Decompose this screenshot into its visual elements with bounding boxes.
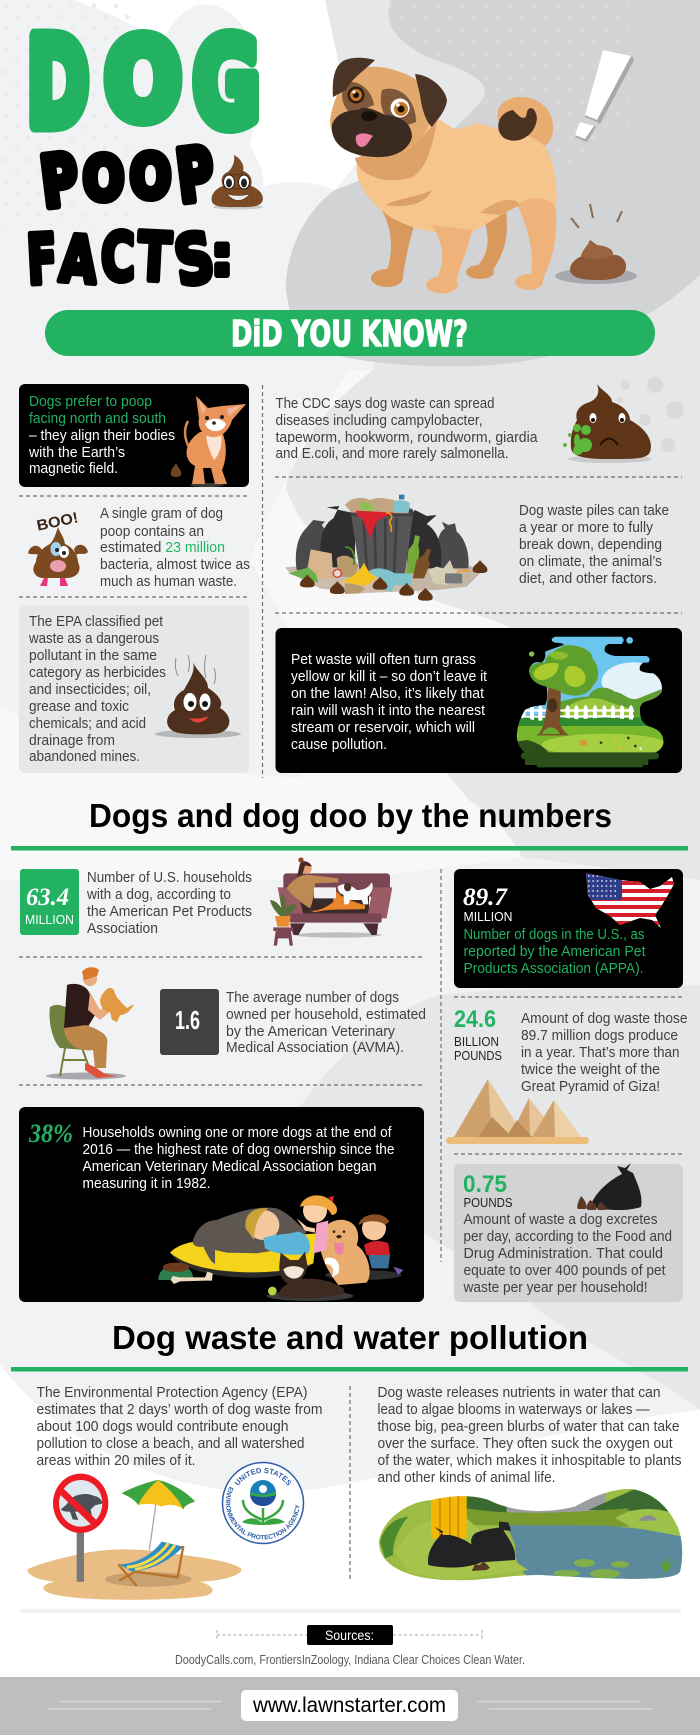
title word: DOG: G <box>193 15 260 154</box>
golden dog <box>320 1220 370 1285</box>
banana <box>341 563 377 586</box>
small poop <box>472 1561 490 1571</box>
fact text: diet, and other factors. <box>519 570 657 587</box>
plant <box>270 893 297 917</box>
sources text: DoodyCalls.com, FrontiersInZoology, Indiana Clear Choices Clean Water. <box>175 1652 525 1667</box>
fact text: bacteria, almost twice as <box>100 556 250 573</box>
sources label <box>217 1625 482 1645</box>
sack <box>337 556 358 577</box>
fact text <box>82 1124 394 1192</box>
title word: FACTS:: A <box>57 223 100 299</box>
dog <box>338 882 373 904</box>
fact text: 2016 — the highest rate of dog ownership since the <box>82 1141 394 1158</box>
woman <box>287 875 338 908</box>
dividers left column <box>19 496 248 597</box>
icon: exclamation mark <box>575 50 634 142</box>
stat badge: MILLION <box>25 912 74 927</box>
stat <box>463 884 512 924</box>
fact text: pollutant in the same <box>29 647 157 664</box>
fact text: measuring it in 1982. <box>82 1175 210 1192</box>
text block: algae blooms: Dog waste releases nutrients in water that can <box>378 1384 660 1401</box>
fact text: 89.7 million dogs produce <box>521 1027 678 1044</box>
fact text: waste per year per household! <box>463 1279 648 1296</box>
text block: EPA beach estimate <box>36 1384 322 1469</box>
pug near legs <box>518 198 556 280</box>
pug muzzle <box>332 108 412 157</box>
illustration: beach with no-dog sign <box>27 1474 242 1600</box>
stat: POUNDS <box>454 1048 502 1063</box>
fact text: equate to over 400 pounds of pet <box>464 1262 666 1279</box>
deck chair <box>118 1542 183 1586</box>
fact text: The average number of dogs <box>226 989 399 1006</box>
banner: did you know <box>45 310 655 356</box>
fact text: the American Pet Products <box>87 903 252 920</box>
text block: EPA beach estimate: The Environmental Protection Agency (EPA) <box>36 1384 308 1401</box>
icon: sad poop <box>568 384 652 463</box>
panel: 38% households <box>19 1107 424 1302</box>
blue rubbish <box>368 568 412 592</box>
overflow <box>345 498 410 513</box>
fact text <box>521 1010 688 1095</box>
icon: EPA seal: UNITED STATES <box>234 1468 292 1486</box>
paper bag <box>306 549 333 578</box>
green rule <box>11 1367 688 1372</box>
heading: water pollution: Dog waste and water pollution <box>112 1319 588 1356</box>
panel: 24.6 billion pounds <box>446 1006 688 1144</box>
banner: did you know: DiD YOU KNOW? <box>231 314 468 355</box>
fact text: category as herbicides <box>29 664 166 681</box>
stat: 24.6 <box>454 1006 496 1033</box>
fact text: stream or reservoir, which will <box>291 719 475 736</box>
title word: POOP: P <box>172 131 219 219</box>
illustration: pug <box>330 58 557 294</box>
pug eyes <box>348 86 410 118</box>
illustration: trash pile <box>285 495 487 601</box>
bowl <box>158 1265 193 1280</box>
title word: DOG: O <box>105 16 181 144</box>
fact text: Products Association (APPA). <box>464 960 644 977</box>
fact text: tapeworm, hookworm, roundworm, giardia <box>276 429 538 446</box>
text block: algae blooms: lead to algae blooms in waterways or lakes — <box>378 1401 650 1418</box>
husky <box>279 1252 307 1285</box>
fact text: Medical Association (AVMA). <box>226 1039 404 1056</box>
can <box>351 512 413 573</box>
icon: small poop <box>171 463 181 477</box>
stat badge: 1.6 <box>175 1005 200 1035</box>
illustration: polluted pond <box>379 1489 682 1580</box>
bottles <box>406 535 420 573</box>
stat: 0.75 <box>463 1171 507 1198</box>
panel: bacteria fact <box>28 505 250 590</box>
pug eye patches <box>342 82 374 114</box>
panel: 1.6 dogs per household <box>46 967 426 1080</box>
fact text: owned per household, estimated <box>226 1006 426 1023</box>
green rubbish <box>288 567 318 583</box>
divider band <box>20 1609 681 1613</box>
illustration: lawn and tree scene <box>515 635 668 767</box>
title word: DOG: D <box>27 12 89 154</box>
fact text: Dogs prefer to poop <box>29 393 152 410</box>
fact text: poop contains an <box>100 523 204 540</box>
fact text: with the Earth’s <box>28 444 125 461</box>
fact text: per day, according to the Food and <box>464 1228 672 1245</box>
icon: green germs <box>563 424 592 455</box>
fact text: reported by the American Pet <box>464 943 646 960</box>
canopy <box>529 645 598 696</box>
fact text: on climate, the animal’s <box>519 553 662 570</box>
pug head <box>330 67 432 158</box>
fact text: with a dog, according to <box>86 886 231 903</box>
sand <box>27 1549 242 1600</box>
fact text: Number of U.S. households <box>87 869 252 886</box>
fact text: cause pollution. <box>291 736 387 753</box>
fact text <box>519 502 669 587</box>
stat: MILLION <box>464 909 512 924</box>
icon: USA flag map <box>586 873 674 928</box>
fact text: grease and toxic <box>29 698 129 715</box>
poop piles <box>300 560 487 601</box>
fact text: A single gram of dog <box>100 505 223 522</box>
divider: water section <box>349 1386 351 1582</box>
fact text <box>463 1211 672 1296</box>
sources label: Sources: <box>325 1628 374 1643</box>
title word: FACTS:: T <box>136 218 173 297</box>
fact text: chemicals; and acid <box>29 715 146 732</box>
panel: EPA classified pet waste <box>19 605 249 773</box>
fact text: abandoned mines. <box>29 748 140 765</box>
fact text <box>100 505 250 590</box>
icon: smiling poop <box>155 655 241 738</box>
fact text: facing north and south <box>29 410 166 427</box>
fact text: on the lawn! Also, it’s likely that <box>291 685 485 702</box>
title word: FACTS: <box>25 218 233 302</box>
text block: algae blooms: of the water, which makes it inhospitable to plants <box>378 1452 682 1469</box>
stat: 38% <box>28 1119 73 1148</box>
stat badge <box>160 989 219 1055</box>
stat: POUNDS <box>464 1195 513 1210</box>
illustration: man holding puppy <box>46 967 134 1080</box>
fact text: Number of dogs in the U.S., as <box>464 926 644 943</box>
text block: algae blooms: and other kinds of animal life. <box>378 1469 556 1486</box>
title word: FACTS:: S <box>169 218 219 302</box>
pug tail dark <box>498 108 537 141</box>
heading: by the numbers: Dogs and dog doo by the numbers <box>89 797 612 834</box>
fact text: Dog waste piles can take <box>519 502 669 519</box>
trash bags <box>428 1522 515 1568</box>
fact text: twice the weight of the <box>521 1061 660 1078</box>
fact text <box>276 395 538 462</box>
text block: EPA beach estimate: pollution to close a beach, and all watershed <box>36 1435 304 1452</box>
stat badge <box>20 869 79 935</box>
panel: decomposition fact <box>285 495 669 601</box>
fact text: Drug Administration. That could <box>464 1245 663 1262</box>
fact text: and E.coli, and more rarely salmonella. <box>276 445 508 462</box>
icon: EPA seal <box>222 1462 304 1544</box>
stat <box>463 1171 513 1210</box>
small lawn spots <box>580 737 642 750</box>
panel: 0.75 pounds <box>454 1163 683 1302</box>
fact text: estimated 23 million <box>100 539 225 556</box>
stat badge: 63.4 <box>26 884 69 911</box>
text block: EPA beach estimate: about 100 dogs would contribute enough <box>36 1418 288 1435</box>
panel: north and south fact <box>19 384 249 487</box>
text block: algae blooms: over the surface. They often suck the oxygen out <box>378 1435 673 1452</box>
icon: pyramids <box>446 1079 589 1144</box>
fact text: drainage from <box>29 732 115 749</box>
title word: FACTS:: : <box>211 224 233 288</box>
fence <box>520 705 634 721</box>
fact text: break down, depending <box>519 536 662 553</box>
fact text: The CDC says dog waste can spread <box>276 395 494 412</box>
fact text: – they align their bodies <box>29 427 175 444</box>
fact text: much as human waste. <box>100 573 237 590</box>
green rule <box>11 846 688 850</box>
title word: POOP <box>36 131 219 224</box>
fact text: and insecticides; oil, <box>29 681 151 698</box>
fact text: American Veterinary Medical Association began <box>82 1158 376 1175</box>
fact text <box>226 989 426 1056</box>
title word: POOP: P <box>36 138 83 224</box>
pug tail <box>497 97 553 147</box>
no-dog sign <box>53 1474 108 1533</box>
title word: FACTS:: F <box>25 220 59 301</box>
ground litter <box>285 565 483 593</box>
fact text: diseases including campylobacter, <box>276 412 482 429</box>
fact text: yellow or kill it – so don’t leave it <box>291 668 488 685</box>
fact text <box>291 651 488 753</box>
fact text: magnetic field. <box>29 460 118 477</box>
boy <box>362 1216 386 1240</box>
fact text <box>86 869 252 937</box>
title word: DOG <box>27 12 260 154</box>
fact text <box>28 613 166 765</box>
grey dog <box>193 1208 307 1264</box>
icon: boo poop: BOO! <box>35 509 80 535</box>
icon: poop emoji <box>212 155 263 210</box>
fact text: Households owning one or more dogs at the end of <box>82 1124 392 1141</box>
panel: 89.7 million dogs <box>454 869 683 988</box>
right rubbish <box>428 560 463 585</box>
fact text: Pet waste will often turn grass <box>291 651 476 668</box>
fact text: The EPA classified pet <box>29 613 164 630</box>
stat <box>454 1006 502 1063</box>
icon: EPA seal: ENVIRONMENTAL PROTECTION AGENCY <box>226 1486 300 1540</box>
panel: grass and pollution fact <box>276 628 682 773</box>
bags <box>296 506 469 570</box>
icon: chihuahua <box>185 396 246 487</box>
fact text: Association <box>87 920 158 937</box>
text block: EPA beach estimate: areas within 20 miles of it. <box>36 1452 196 1469</box>
text block: algae blooms: those big, pea-green blurbs of water that can take <box>378 1418 680 1435</box>
title word: POOP: O <box>83 144 124 214</box>
pug far legs <box>371 208 507 287</box>
post <box>77 1533 84 1582</box>
fact text: a year or more to fully <box>519 519 653 536</box>
icon: trash bag with poop <box>577 1163 641 1210</box>
pug body <box>357 118 557 234</box>
icon: germs background <box>617 377 684 452</box>
pug ears <box>333 58 375 97</box>
fact text <box>464 926 646 977</box>
fact text: Amount of dog waste those <box>521 1010 688 1027</box>
pug nose and tongue <box>356 111 377 147</box>
divider: numbers vertical <box>440 869 442 1262</box>
fact text: rain will wash it into the nearest <box>291 702 486 719</box>
fact text: waste as a dangerous <box>28 630 159 647</box>
bone <box>171 1272 213 1284</box>
divider: center vertical <box>262 385 264 778</box>
umbrella <box>122 1480 195 1550</box>
fact text: Great Pyramid of Giza! <box>521 1078 660 1095</box>
trunk <box>537 687 569 735</box>
title word: FACTS:: C <box>101 219 135 296</box>
text block: algae blooms <box>378 1384 682 1486</box>
cushion <box>170 1233 317 1274</box>
illustration: woman on sofa with dog <box>270 857 392 946</box>
panel: 63.4 million households <box>20 857 392 946</box>
icon: poop with motion lines <box>555 204 637 284</box>
girl <box>303 1199 327 1223</box>
baby <box>247 1210 279 1240</box>
fact text: in a year. That’s more than <box>521 1044 680 1061</box>
fact text <box>28 393 175 477</box>
footer <box>0 1677 700 1735</box>
icon: boo poop <box>28 509 88 586</box>
fact text: by the American Veterinary <box>226 1023 395 1040</box>
text block: EPA beach estimate: estimates that 2 days’ worth of dog waste from <box>36 1401 322 1418</box>
title word: POOP: O <box>130 142 171 212</box>
footer url <box>241 1690 458 1721</box>
stat: 89.7 <box>463 884 509 911</box>
pug chest fur <box>355 120 437 180</box>
panel: CDC disease fact <box>276 377 684 463</box>
title <box>25 12 260 302</box>
fact text: Amount of waste a dog excretes <box>464 1211 658 1228</box>
stat: BILLION <box>454 1034 499 1049</box>
footer url: www.lawnstarter.com <box>252 1694 446 1717</box>
illustration: children with dogs <box>158 1195 403 1301</box>
apple <box>333 569 341 577</box>
